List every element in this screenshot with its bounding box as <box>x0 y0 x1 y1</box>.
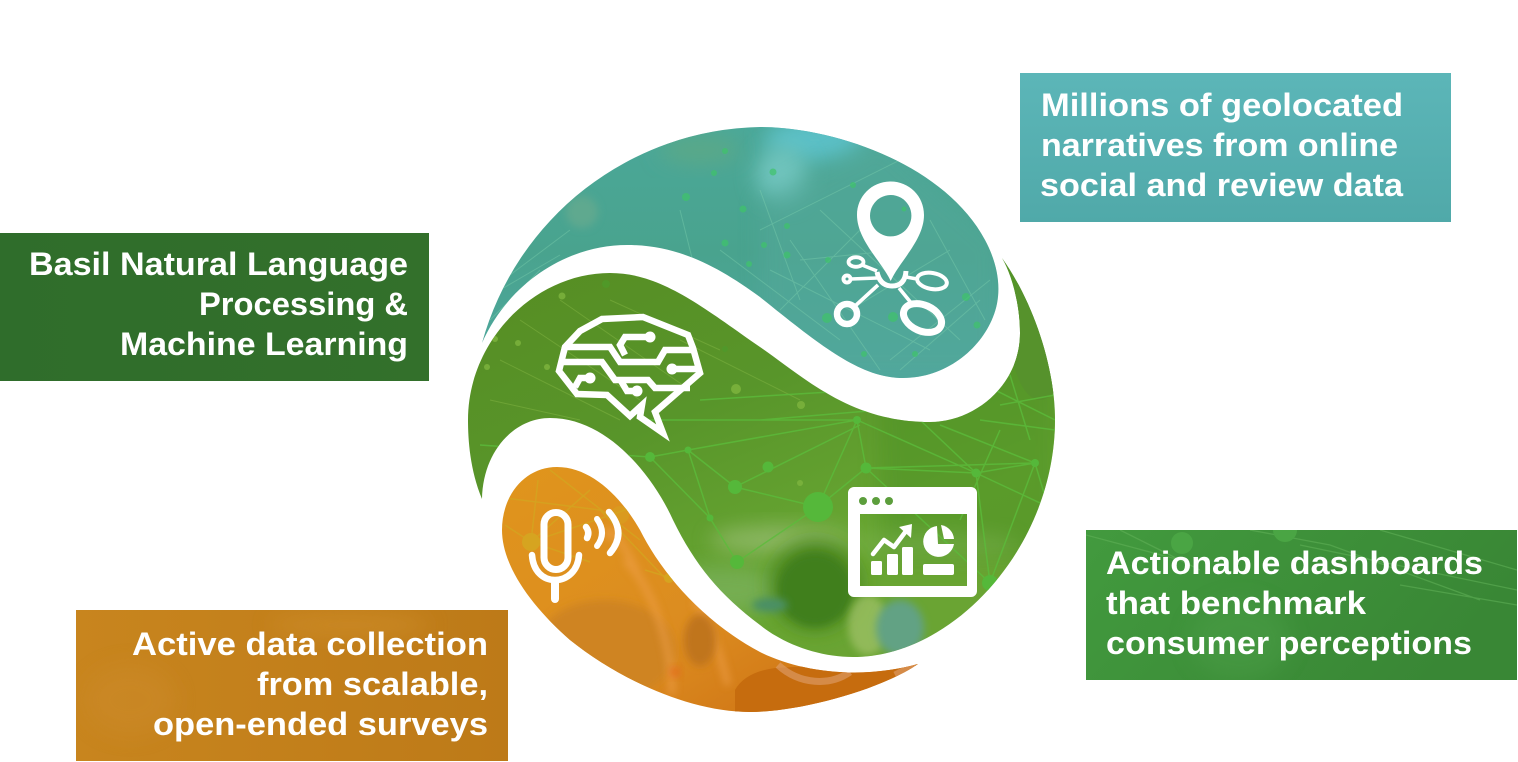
icon: dashboard window <box>848 487 977 597</box>
heading: geolocated narratives: social and review data <box>1040 167 1403 203</box>
icon: brain with circuits <box>559 317 700 433</box>
heading: actionable dashboards: consumer perceptions <box>1106 625 1472 661</box>
heading: geolocated narratives <box>1040 87 1403 203</box>
heading: active data collection: open-ended surveys <box>153 706 488 742</box>
heading: Basil NLP <box>29 246 408 362</box>
heading: Basil NLP: Machine Learning <box>120 326 408 362</box>
panel: location data shape <box>482 127 998 378</box>
heading: Basil NLP: Processing & <box>199 286 408 322</box>
heading: actionable dashboards: that benchmark <box>1106 585 1366 621</box>
heading: geolocated narratives: Millions of geolocated <box>1041 87 1403 123</box>
heading: active data collection: from scalable, <box>257 666 488 702</box>
icon: location pin with network <box>837 182 948 338</box>
heading: actionable dashboards <box>1106 545 1483 661</box>
icon: microphone <box>532 512 618 599</box>
heading: actionable dashboards: Actionable dashboards <box>1106 545 1483 581</box>
heading: geolocated narratives: narratives from online <box>1041 127 1398 163</box>
heading: active data collection <box>132 626 488 742</box>
panel: Basil natural language processing <box>0 233 429 381</box>
panel: survey collection shape <box>495 460 925 720</box>
panel: language processing shape <box>460 250 1070 670</box>
panel: active data collection <box>76 610 508 761</box>
heading: Basil NLP: Basil Natural Language <box>29 246 408 282</box>
panel: geolocated narratives <box>1020 73 1451 222</box>
panel: actionable dashboards <box>1086 518 1517 680</box>
heading: active data collection: Active data collection <box>132 626 488 662</box>
